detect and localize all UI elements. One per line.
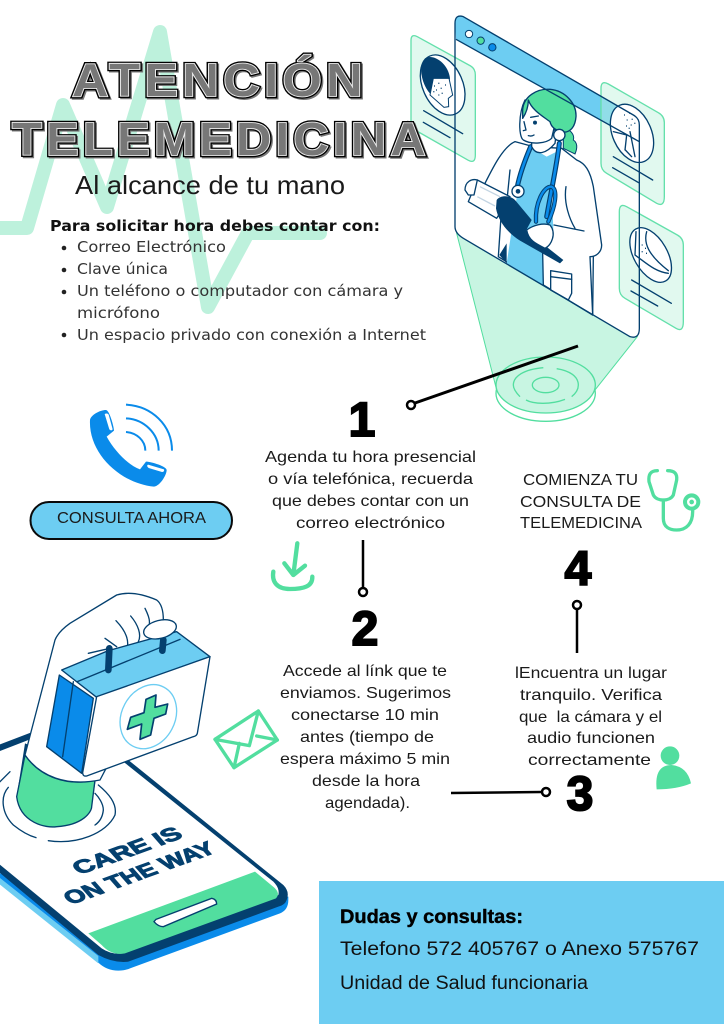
connector line 3 [451, 788, 550, 796]
patient card: shoulder [601, 83, 664, 204]
step 3 text: tranquilo. Verifica [520, 687, 662, 704]
title line 2: TELEMEDICINA [12, 113, 430, 165]
connector line 1 [407, 346, 578, 409]
requirements heading: Para solicitar hora debes contar con: [50, 217, 380, 235]
step 2 text [280, 663, 451, 812]
requirements block [50, 217, 426, 344]
sleeve [17, 743, 97, 827]
contact unit: Unidad de Salud funcionaria [340, 973, 588, 994]
subtitle: Al alcance de tu mano [75, 170, 345, 200]
patient card: face [411, 36, 475, 161]
phone body [0, 732, 288, 971]
step 1 text: o vía telefónica, recuerda [268, 471, 473, 488]
step 1 text: Agenda tu hora presencial [265, 449, 476, 466]
step 3 text: correctamente [528, 752, 651, 769]
paper and folder [468, 180, 510, 218]
step 2 text: espera máximo 5 min [280, 751, 450, 768]
requirements list: Un teléfono o computador con cámara y [77, 282, 403, 300]
connector line 4 [573, 601, 581, 653]
doctor figure [465, 89, 602, 315]
step 1 text: que debes contar con un [272, 493, 469, 510]
hologram base [496, 357, 595, 421]
head and hair [532, 130, 557, 153]
icon: envelope [215, 711, 277, 768]
panel: contact [319, 881, 724, 1024]
icon: phone [90, 405, 172, 487]
projection cone [457, 233, 637, 390]
step 4 text: CONSULTA DE [520, 494, 641, 511]
icon: person [656, 746, 691, 789]
button: consulta ahora [30, 502, 232, 539]
step 4 text: COMIENZA TU [523, 472, 638, 489]
step 3 text: audio funcionen [527, 730, 655, 747]
step 4 text: TELEMEDICINA [520, 515, 642, 532]
step 2 text: agendada). [325, 795, 410, 812]
step 2 text: enviamos. Sugerimos [280, 685, 451, 702]
step 2 text: conectarse 10 min [291, 707, 439, 724]
icon: stethoscope [649, 471, 698, 530]
requirements list: Correo Electrónico [77, 238, 226, 256]
step number 1: 1 [349, 394, 375, 447]
title line 2: TELEMEDICINA [14, 114, 431, 166]
contact phone: Telefono 572 405767 o Anexo 575767 [340, 939, 699, 960]
care is on the way text: ON THE WAY [58, 838, 221, 909]
requirements list [62, 238, 426, 344]
step 3 text: lEncuentra un lugar [515, 665, 668, 682]
connector line 2 [359, 540, 367, 596]
title [12, 54, 431, 166]
title line 1: ATENCIÓN [72, 54, 367, 106]
title line 1: ATENCIÓN [72, 54, 367, 106]
requirements list: Un espacio privado con conexión a Internet [77, 326, 426, 344]
medical kit [47, 617, 210, 776]
patient card: foot [619, 205, 683, 330]
title line 1: ATENCIÓN [74, 56, 369, 108]
care is on the way text [58, 823, 221, 909]
step number 4: 4 [565, 543, 592, 596]
step 1 text [265, 449, 476, 532]
step 1 text: correo electrónico [296, 515, 445, 532]
stethoscope [517, 143, 559, 217]
step 2 text: desde la hora [312, 773, 420, 790]
step 2 text: antes (tiempo de [300, 729, 434, 746]
phone and medical kit illustration [0, 593, 288, 971]
step 4 text [520, 472, 642, 532]
icon: download [273, 543, 312, 589]
requirements list: micrófono [77, 304, 160, 322]
care is on the way text: CARE IS [67, 823, 188, 879]
contact heading: Dudas y consultas: [340, 907, 523, 928]
hand [25, 593, 177, 782]
step number 3: 3 [567, 768, 593, 821]
step 2 text: Accede al línk que te [283, 663, 447, 680]
ecg background line [0, 32, 320, 307]
step 3 text: que la cámara y el [519, 709, 662, 726]
requirements list: Clave única [77, 260, 168, 278]
step 3 text [515, 665, 668, 769]
doctor illustration [411, 16, 683, 421]
ripple rings [0, 772, 115, 842]
window outline [455, 16, 639, 337]
step number 2: 2 [352, 603, 378, 656]
button: consulta ahora: CONSULTA AHORA [57, 510, 206, 527]
browser window [455, 16, 639, 337]
title line 2: TELEMEDICINA [12, 113, 430, 165]
